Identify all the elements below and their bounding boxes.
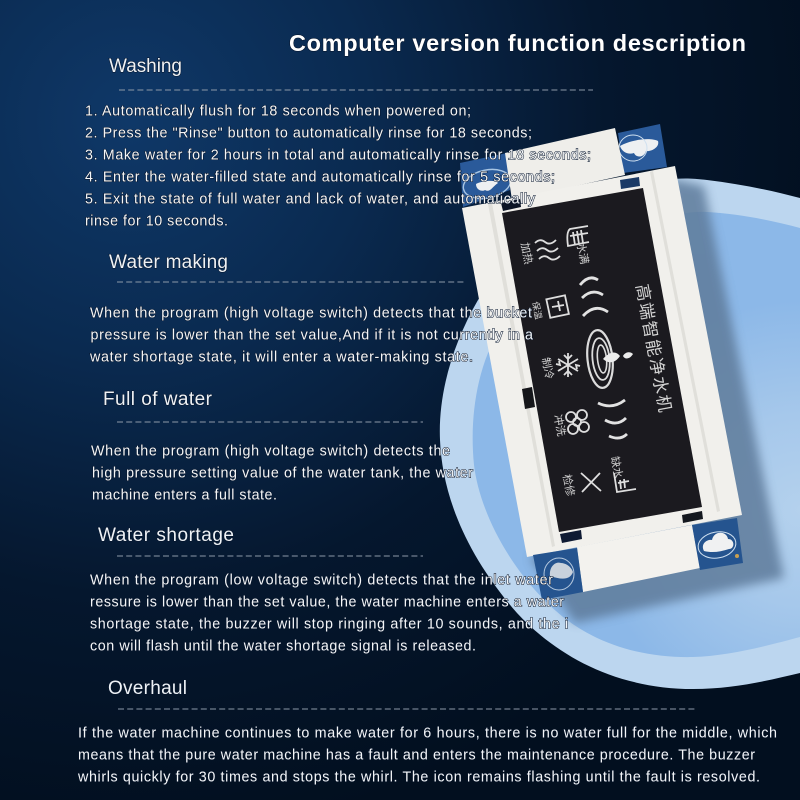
LCD title: 高端智能净水机 — [631, 282, 680, 416]
icon: heating: 加热 — [517, 241, 537, 266]
washing text: rinse for 10 seconds. — [85, 214, 228, 230]
water making text: When the program (high voltage switch) detects that the bucket — [90, 306, 532, 322]
light blue blob — [440, 178, 800, 689]
heading: full of water: Full of water — [103, 389, 213, 410]
signal arcs lower — [598, 400, 627, 438]
icon: heating — [517, 240, 560, 266]
icon: repair tools: 检修 — [559, 473, 579, 498]
water making text: water shortage state, it will enter a water-making state. — [89, 350, 473, 366]
icon: water shortage: 缺水 — [607, 455, 627, 480]
full of water text — [91, 444, 473, 504]
title: Computer version function description — [289, 30, 746, 56]
heading: overhaul: Overhaul — [108, 678, 187, 699]
full of water text: When the program (high voltage switch) detects the — [91, 444, 450, 460]
overhaul text: If the water machine continues to make water for 6 hours, there is no water full for the middle, which — [78, 726, 777, 742]
washing text — [85, 104, 591, 230]
full of water text: high pressure setting value of the water tank, the water — [92, 466, 473, 482]
water shortage text — [90, 572, 568, 654]
washing text: 1. Automatically flush for 18 seconds when powered on; — [85, 104, 471, 120]
water making text: pressure is lower than the set value,And if it is not currently in a — [90, 328, 533, 344]
icon: flush: 冲洗 — [550, 413, 570, 438]
washing text: 4. Enter the water-filled state and automatically rinse for 5 seconds; — [85, 170, 555, 186]
icon: water shortage — [607, 455, 636, 492]
full of water text: machine enters a full state. — [92, 488, 277, 504]
purifier control panel — [460, 124, 743, 600]
heading: water making: Water making — [109, 252, 228, 273]
icon: flush — [550, 410, 589, 438]
icon: full water: 水满 — [573, 241, 593, 266]
overhaul text — [77, 726, 777, 786]
icon: keep warm: 保温 — [529, 300, 546, 320]
washing text: 5. Exit the state of full water and lack of water, and automatically — [85, 192, 536, 208]
slots — [501, 177, 703, 543]
lower white tail — [577, 525, 700, 592]
washing text: 3. Make water for 2 hours in total and automatically rinse for 18 seconds; — [85, 148, 591, 164]
section: water shortage — [90, 525, 568, 654]
section: water making — [89, 252, 533, 366]
upper plate — [505, 128, 625, 200]
icon: repair tools — [559, 473, 601, 498]
signal arcs upper — [580, 278, 608, 316]
water shortage text: con will flash until the water shortage signal is released. — [90, 638, 476, 654]
section: overhaul — [77, 678, 777, 786]
bottom left tab — [533, 548, 583, 600]
heading: washing: Washing — [109, 56, 182, 77]
bottom right tab — [692, 518, 743, 570]
device shadow — [530, 178, 784, 623]
main white body — [462, 166, 742, 557]
icon: snowflake cooling: 制冷 — [538, 356, 558, 381]
icon: central tap target — [585, 329, 633, 389]
heading: water shortage: Water shortage — [98, 525, 234, 546]
icon: keep warm — [529, 295, 569, 320]
overhaul text: means that the pure water machine has a fault and enters the maintenance procedure. The buzzer — [78, 748, 755, 764]
water making text — [89, 306, 533, 366]
water shortage text: ressure is lower than the set value, the water machine enters a water — [90, 594, 564, 610]
top mounting tabs — [460, 124, 667, 207]
overhaul text: whirls quickly for 30 times and stops the whirl. The icon remains flashing until the fault is resolved. — [77, 770, 760, 786]
section: full of water — [91, 389, 473, 504]
washing text: 2. Press the "Rinse" button to automatically rinse for 18 seconds; — [85, 126, 532, 142]
water shortage text: shortage state, the buzzer will stop ringing after 10 sounds, and the i — [90, 616, 568, 632]
icon: full water — [567, 226, 593, 266]
black LCD panel — [502, 188, 702, 532]
icon: snowflake cooling — [538, 353, 580, 381]
water shortage text: When the program (low voltage switch) detects that the inlet water — [90, 572, 553, 588]
section: washing — [85, 56, 593, 230]
